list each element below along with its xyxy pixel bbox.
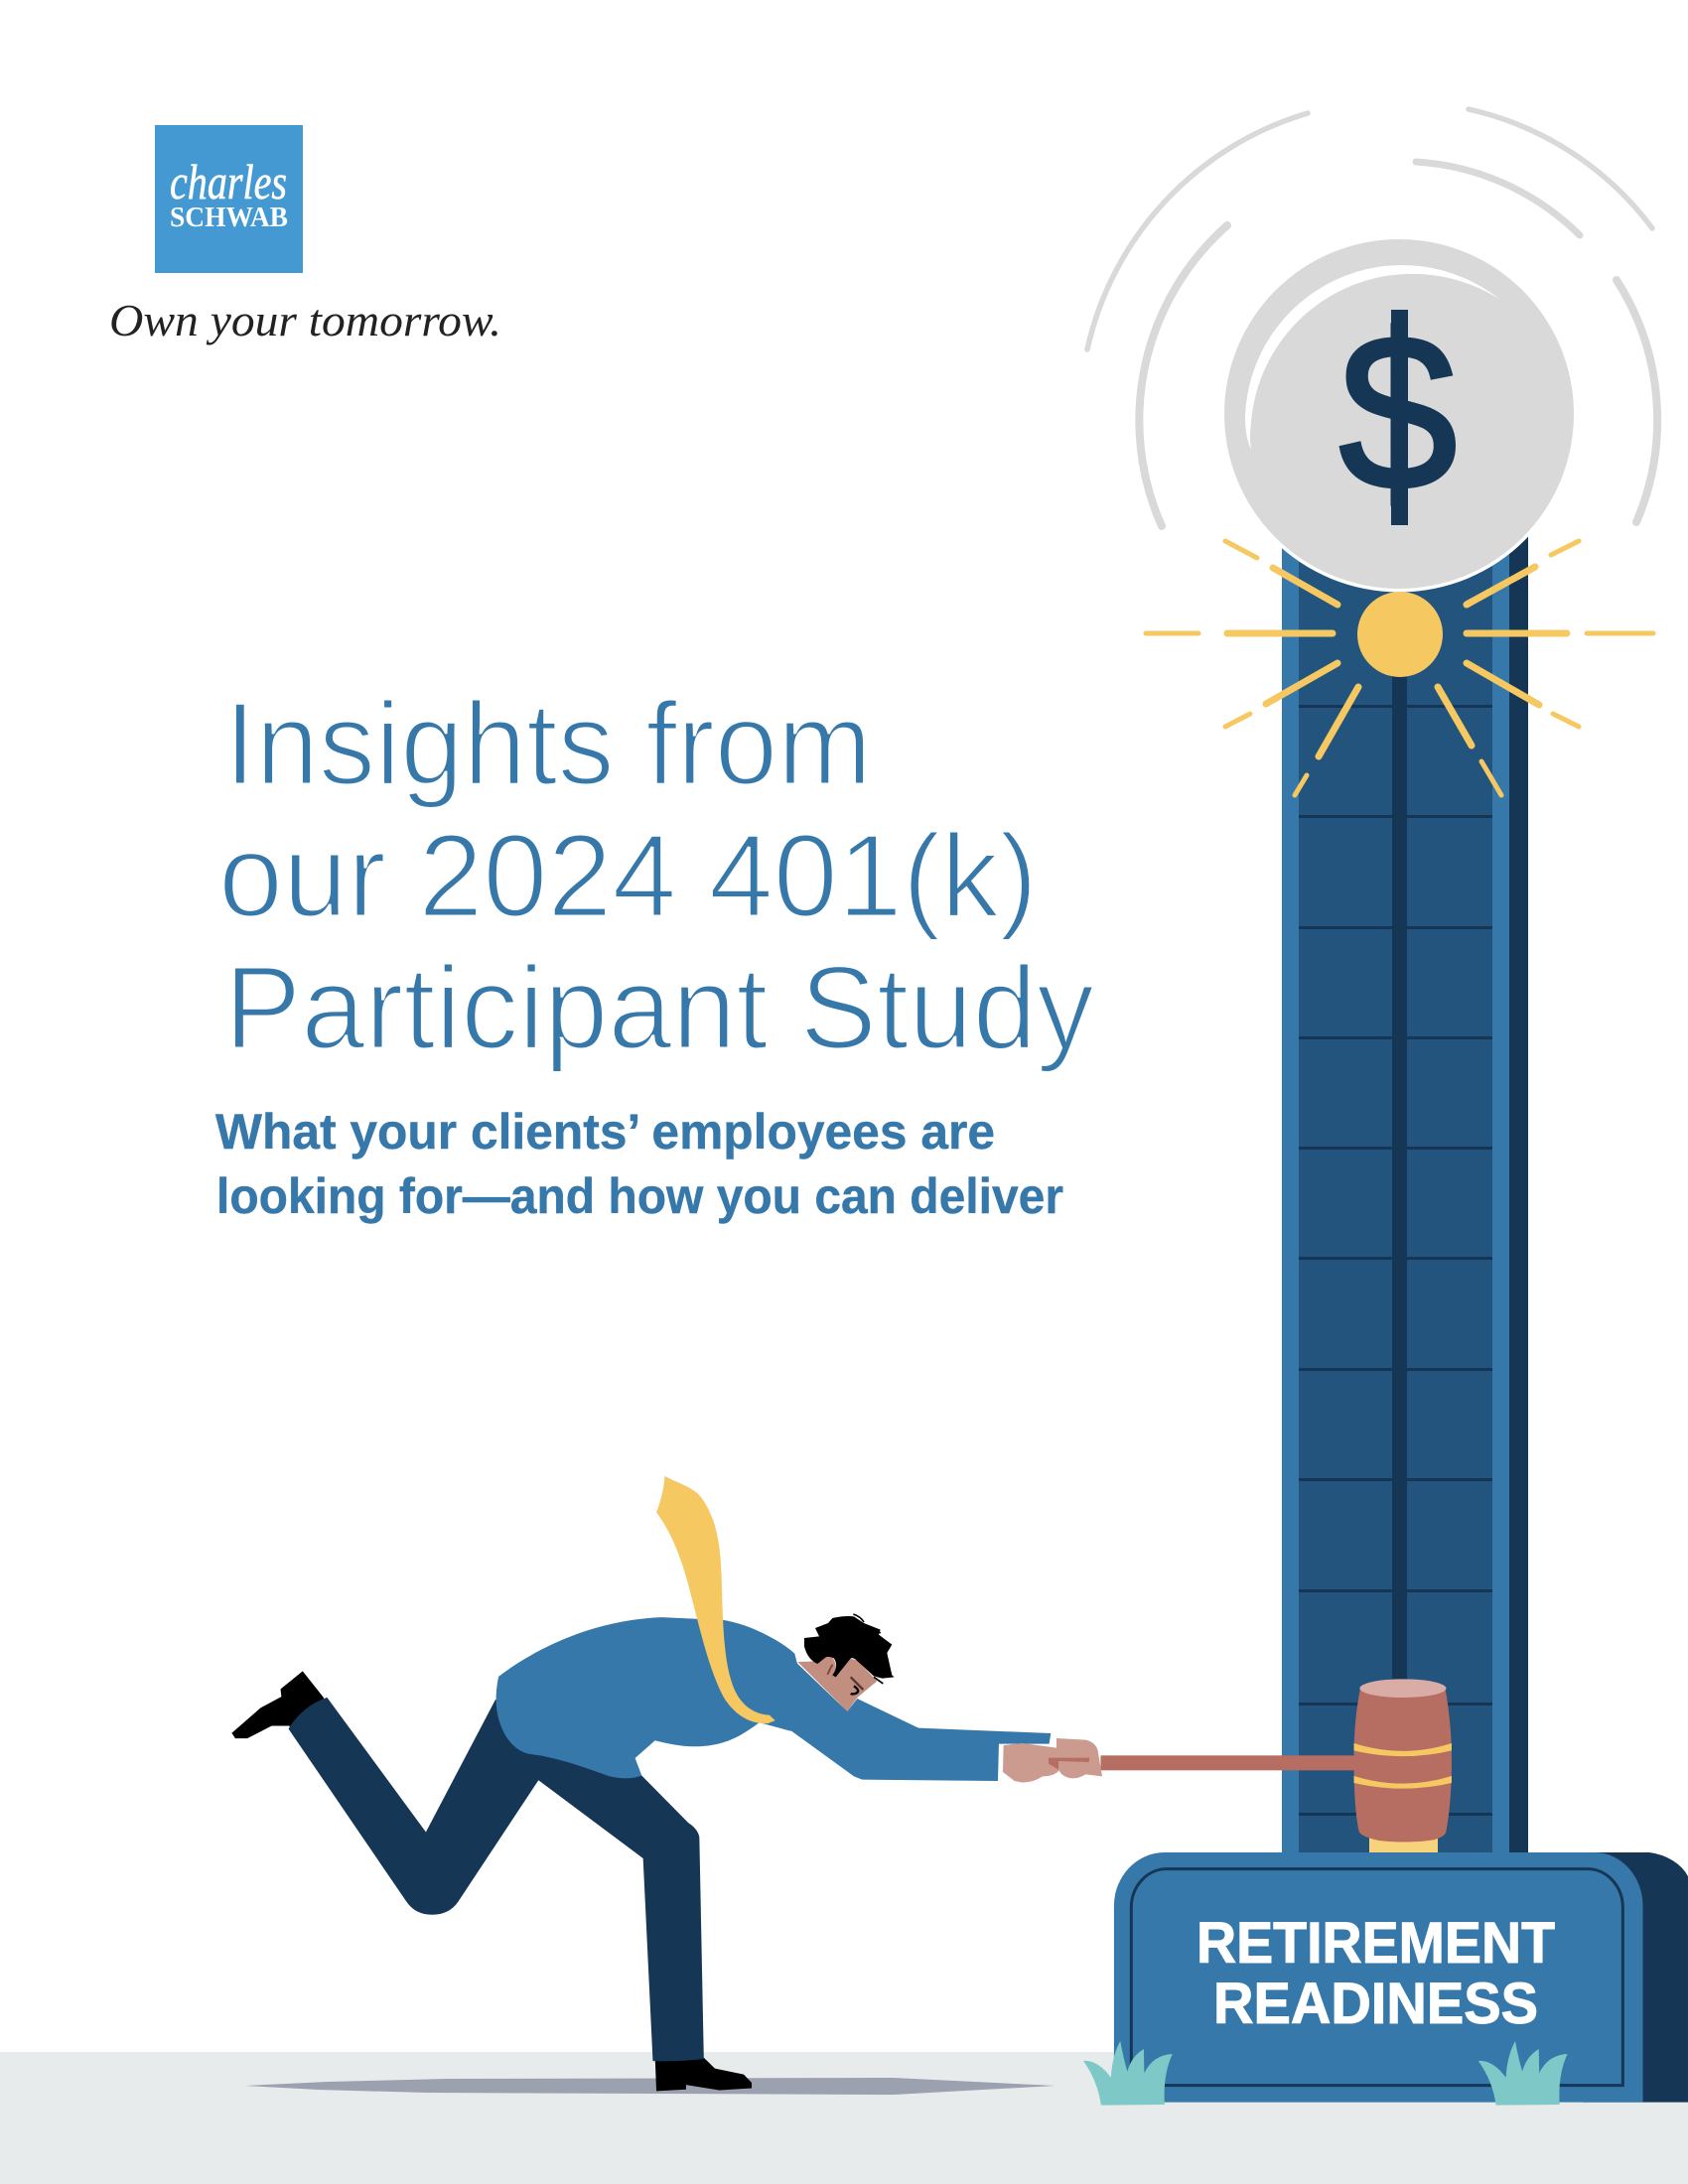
title: Participant Study — [224, 942, 1094, 1074]
subtitle — [215, 1104, 1063, 1224]
subtitle: looking for—and how you can deliver — [216, 1168, 1063, 1224]
sign base: Retirement Readiness: RETIREMENT — [1196, 1911, 1555, 1976]
sign base: Retirement Readiness: READINESS — [1213, 1972, 1538, 2036]
man swinging mallet — [231, 1476, 1102, 2091]
yellow block under mallet — [1369, 1838, 1438, 1852]
grass tufts — [1083, 2041, 1568, 2106]
high striker tower — [1282, 526, 1528, 1856]
title — [218, 678, 1094, 1074]
mallet — [1100, 1679, 1452, 1842]
ground shadow — [245, 2078, 1055, 2095]
motion arcs around coin — [1087, 109, 1657, 526]
man: legs and shoes — [231, 1671, 752, 2091]
bell light and rays — [1146, 541, 1653, 795]
ground band — [0, 2052, 1688, 2184]
man: head and arm — [755, 1614, 1102, 1783]
sign base: Retirement Readiness — [1114, 1852, 1688, 2103]
man: torso — [496, 1617, 857, 1778]
logo: Charles Schwab: charles — [170, 154, 287, 209]
subtitle: What your clients’ employees are — [215, 1104, 995, 1160]
title: our 2024 401(k) — [218, 810, 1038, 942]
tagline: Own your tomorrow. — [109, 295, 501, 345]
coin with dollar sign — [1221, 236, 1577, 592]
logo: Charles Schwab: SCHWAB — [170, 202, 288, 233]
coin with dollar sign: $ — [1339, 290, 1457, 536]
title: Insights from — [224, 678, 872, 810]
logo: Charles Schwab — [155, 125, 303, 273]
man: flying tie — [656, 1476, 775, 1723]
